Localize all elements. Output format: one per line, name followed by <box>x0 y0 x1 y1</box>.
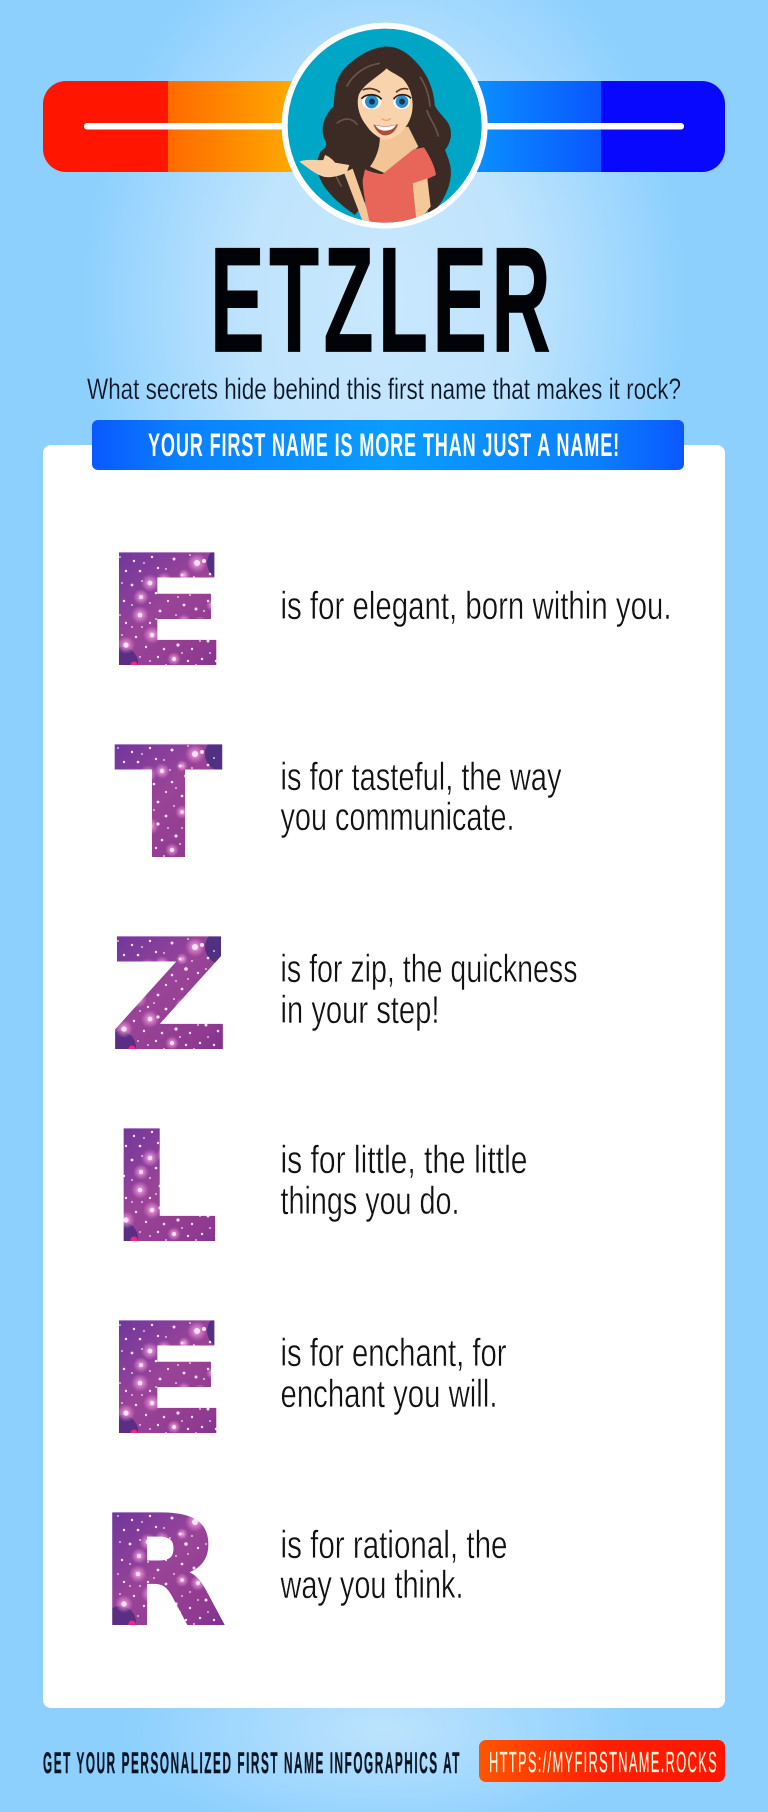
right arm <box>413 178 431 223</box>
row 1: letter E <box>105 526 672 699</box>
row 5: letter E <box>105 1294 507 1467</box>
letter R: R <box>100 1486 224 1659</box>
white content panel <box>43 445 725 1708</box>
letter T: T <box>116 718 221 891</box>
shirt <box>363 147 436 223</box>
letter E: E <box>105 526 227 699</box>
eyebrows <box>363 89 408 92</box>
footer URL button <box>479 1740 725 1782</box>
letter Z: Z <box>110 910 228 1083</box>
text: E <box>280 1332 507 1416</box>
nose <box>382 118 391 120</box>
row 2: letter T <box>116 718 562 891</box>
eyes <box>361 94 411 109</box>
letter L: L <box>110 1102 218 1275</box>
text: Z <box>280 948 578 1032</box>
icon: woman avatar in circle <box>285 26 485 226</box>
text: Z: is for zip, the quickness <box>280 948 578 991</box>
row 6: letter R <box>100 1486 508 1659</box>
text: R: way you think. <box>280 1564 464 1607</box>
hair <box>317 47 451 215</box>
text: T: you communicate. <box>280 796 514 839</box>
text: Z: in your step! <box>280 989 440 1032</box>
neck and chest <box>370 127 418 173</box>
hand <box>299 155 349 177</box>
banner <box>92 420 684 470</box>
text: T <box>280 756 562 839</box>
text: R: is for rational, the <box>280 1524 508 1567</box>
mouth <box>373 124 398 135</box>
hair highlights <box>328 63 438 187</box>
text: L: things you do. <box>280 1180 460 1223</box>
text: L <box>280 1139 528 1223</box>
header colour bar <box>43 81 725 172</box>
row 3: letter Z <box>110 910 578 1083</box>
text: R <box>280 1524 508 1607</box>
text: L: is for little, the little <box>280 1139 528 1182</box>
row 4: letter L <box>110 1102 528 1275</box>
left arm <box>344 169 372 223</box>
text: E: is for enchant, for <box>280 1332 507 1375</box>
face <box>358 68 413 140</box>
letter E: E <box>105 1294 227 1467</box>
text: T: is for tasteful, the way <box>280 756 562 799</box>
text: E: enchant you will. <box>280 1373 498 1416</box>
